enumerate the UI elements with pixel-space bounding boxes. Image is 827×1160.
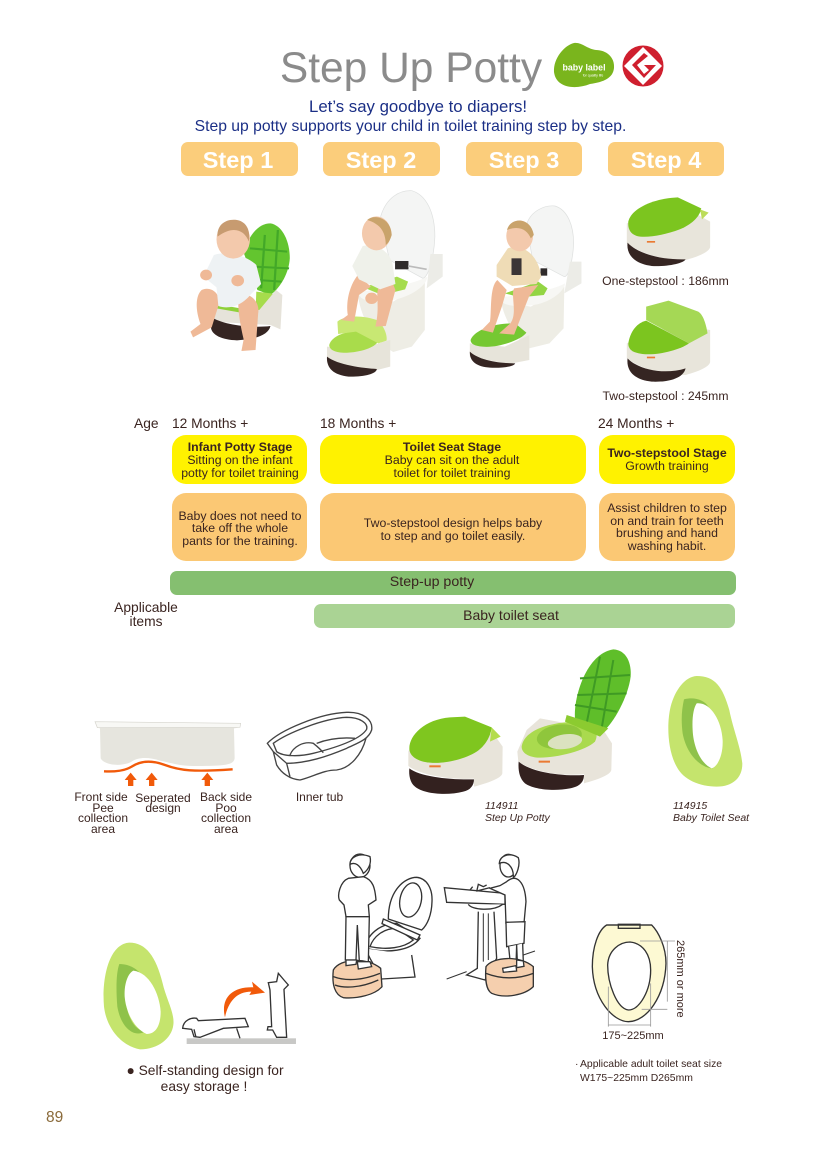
- stool label one: One-stepstool : 186mm: [602, 274, 729, 288]
- step headers: Step 1: [203, 147, 273, 173]
- panel: toilet seat stage: Baby can sit on the adult: [385, 453, 520, 467]
- title: Step Up Potty: [280, 45, 543, 92]
- icon: self-standing storage diagram: [183, 973, 296, 1044]
- age row: [134, 416, 674, 431]
- panel: infant potty stage: Sitting on the infant: [187, 453, 293, 467]
- label: seat width: 175~225mm: [602, 1030, 664, 1042]
- panel: infant potty benefit: [172, 493, 307, 561]
- panel: toilet seat stage: toilet for toilet training: [394, 466, 511, 480]
- label: applicable items: items: [130, 614, 163, 629]
- labels: tub features: collection: [201, 811, 251, 825]
- panel: infant potty stage: potty for toilet training: [181, 466, 299, 480]
- label: seat depth: 265mm or more: [674, 940, 686, 1018]
- labels: tub features: design: [145, 801, 181, 815]
- text: self-standing design: easy storage !: [161, 1079, 247, 1094]
- panel: infant potty benefit: pants for the training.: [182, 534, 298, 548]
- step headers: Step 4: [631, 147, 701, 173]
- step headers: Step 3: [489, 147, 559, 173]
- panel: two-stepstool benefit: brushing and hand: [616, 526, 718, 540]
- step headers: Step 2: [346, 147, 416, 173]
- photo: step 3 child on toilet with stool: [470, 206, 581, 368]
- photo: step up potty open: [517, 649, 631, 790]
- photo: self-standing baby toilet seat: [104, 943, 174, 1049]
- text: applicable seat size: ·: [575, 1059, 578, 1070]
- panel: two-stepstool stage: [599, 435, 735, 484]
- text: applicable seat size: W175~225mm D265mm: [580, 1073, 693, 1084]
- product caption: baby toilet seat: Baby Toilet Seat: [673, 812, 750, 824]
- photo: step 1 baby on potty: [190, 220, 290, 351]
- photo: step up potty closed: [408, 717, 503, 794]
- panel: toilet seat stage: [320, 435, 586, 484]
- step headers: [181, 142, 724, 176]
- panel: toilet seat benefit: Two-stepstool design helps baby: [364, 516, 543, 530]
- panel: two-stepstool benefit: [599, 493, 735, 561]
- photo: step 4 one-stepstool: [627, 197, 710, 266]
- illustration: child at toilet on stool: [333, 854, 432, 998]
- panel: two-stepstool benefit: on and train for teeth: [610, 514, 724, 528]
- panel: infant potty stage: [172, 435, 307, 484]
- product caption: step up potty: 114911: [485, 800, 518, 812]
- icon: baby label logo: [554, 43, 614, 87]
- panel: two-stepstool benefit: washing habit.: [627, 539, 706, 553]
- labels: tub features: Pee: [92, 801, 114, 815]
- subtitle: [195, 97, 626, 135]
- text: self-standing design: [126, 1063, 284, 1094]
- panel: two-stepstool benefit: Assist children to step: [607, 501, 727, 515]
- panel: infant potty stage: Infant Potty Stage: [188, 440, 292, 454]
- icon: baby label logo: baby label: [562, 62, 606, 72]
- bar: step-up potty: Step-up potty: [390, 574, 475, 590]
- labels: tub features: Seperated: [135, 791, 191, 805]
- label: applicable items: Applicable: [114, 600, 178, 615]
- labels: tub features: Poo: [215, 801, 237, 815]
- product caption: step up potty: [485, 800, 551, 824]
- bar: baby toilet seat: [314, 604, 735, 628]
- photo: baby toilet seat: [668, 676, 742, 787]
- subtitle: Let’s say goodbye to diapers!: [309, 97, 527, 116]
- text: applicable seat size: [575, 1059, 722, 1084]
- icon: baby label logo: for quality life: [583, 74, 603, 78]
- text: applicable seat size: Applicable adult toilet seat size: [580, 1059, 722, 1070]
- panel: two-stepstool stage: Growth training: [625, 459, 709, 473]
- age row: 12 Months +: [172, 416, 248, 431]
- age row: 24 Months +: [598, 416, 674, 431]
- labels: tub features: [74, 790, 252, 836]
- diagram: adult toilet seat size: [592, 924, 675, 1027]
- page number: 89: [46, 1109, 63, 1126]
- illustration: child at sink on stool: [444, 854, 535, 996]
- labels: tub features: Front side: [74, 790, 128, 804]
- panel: two-stepstool stage: Two-stepstool Stage: [607, 446, 727, 460]
- labels: tub features: area: [91, 822, 115, 836]
- bar: step-up potty: [170, 571, 736, 595]
- label: inner tub: Inner tub: [296, 790, 344, 804]
- product caption: baby toilet seat: [673, 800, 750, 824]
- subtitle: Step up potty supports your child in toilet training step by step.: [195, 118, 626, 135]
- stool label two: Two-stepstool : 245mm: [602, 389, 728, 403]
- photo: step 2 baby on toilet with stool: [327, 191, 443, 377]
- text: self-standing design: ● Self-standing design for: [126, 1063, 284, 1078]
- age row: Age: [134, 416, 159, 431]
- product caption: step up potty: Step Up Potty: [485, 812, 551, 824]
- labels: tub features: Back side: [200, 790, 252, 804]
- age row: 18 Months +: [320, 416, 396, 431]
- diagram: separated tub side view: [95, 722, 241, 786]
- panel: toilet seat stage: Toilet Seat Stage: [403, 440, 501, 454]
- labels: tub features: area: [214, 822, 238, 836]
- product caption: baby toilet seat: 114915: [673, 800, 707, 812]
- diagram: inner tub line art: [267, 712, 372, 780]
- panel: toilet seat benefit: to step and go toilet easily.: [381, 529, 525, 543]
- icon: good design G mark: [622, 46, 664, 86]
- panel: toilet seat benefit: [320, 493, 586, 561]
- labels: tub features: collection: [78, 811, 128, 825]
- panel: infant potty benefit: take off the whole: [192, 521, 288, 535]
- panel: infant potty benefit: Baby does not need to: [178, 509, 302, 523]
- bar: baby toilet seat: Baby toilet seat: [463, 607, 559, 623]
- photo: step 4 two-stepstool: [627, 301, 710, 382]
